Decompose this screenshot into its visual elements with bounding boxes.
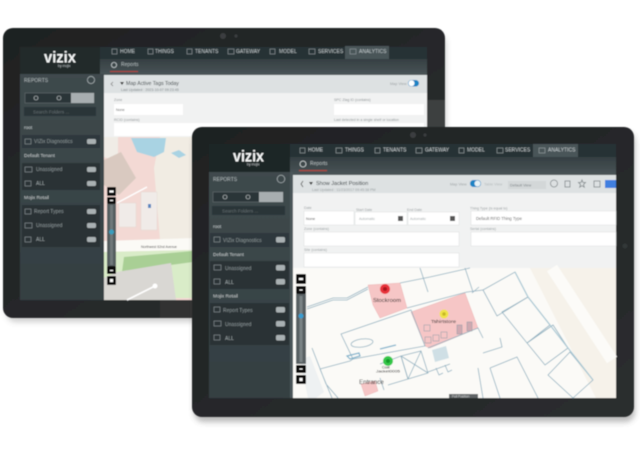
report form: None (116, 108, 125, 112)
report header (293, 175, 616, 193)
navigation bar: MODEL (467, 148, 485, 154)
sidebar: Search Folders ... (33, 110, 69, 114)
navigation bar: THINGS (155, 49, 175, 55)
logo: vizix (44, 50, 76, 67)
navigation bar: TENANTS (195, 49, 219, 55)
report header: Map Active Tags Today (126, 81, 179, 87)
report form: Start Date (356, 208, 372, 212)
navigation bar: THINGS (345, 148, 365, 154)
report form: Automatic (410, 217, 426, 221)
report header: Map View (390, 82, 407, 86)
tablet: back (3, 28, 446, 322)
sidebar: Unassigned (225, 266, 252, 272)
logo (20, 47, 100, 74)
tablet bezel (192, 127, 634, 417)
sidebar: Default Tenant (24, 153, 56, 159)
sidebar: REPORTS (24, 78, 49, 84)
sidebar: Unassigned (225, 322, 252, 328)
report form: Date (304, 206, 312, 210)
navigation bar: SERVICES (318, 49, 344, 55)
report form: RCID (contains) (114, 118, 140, 122)
sidebar: Report Types (223, 308, 253, 314)
sidebar: ALL (225, 336, 234, 342)
sidebar: Search Folders ... (222, 208, 258, 214)
map zoom controls (296, 274, 306, 384)
sidebar: VIZix Diagnostics (34, 139, 73, 145)
report form (104, 93, 427, 138)
navigation bar (20, 46, 427, 75)
marker: yellow item (431, 310, 457, 324)
logo: by mojix (247, 162, 260, 166)
navigation bar: Reports (121, 62, 139, 68)
report form (293, 193, 616, 268)
logo (209, 144, 290, 172)
pink rooms (361, 283, 478, 396)
report form: Default RFID Thing Type (476, 216, 523, 221)
sidebar: Default Tenant (213, 252, 245, 258)
marker: stockroom (373, 284, 401, 304)
sidebar: Report Types (34, 209, 64, 215)
entrance label: Entrance (359, 379, 384, 386)
report form: Zone (114, 98, 122, 102)
report form: Site (contains) (304, 248, 327, 252)
sidebar: Unassigned (36, 223, 63, 229)
street map: Northwest 62nd Avenue (141, 245, 177, 249)
side button (622, 244, 628, 248)
navigation bar: GATEWAY (425, 148, 450, 154)
report header: Last Updated : 2023-10-07 09:23:45 (121, 88, 179, 92)
report form: SPC Zlag ID (contains) (334, 98, 371, 102)
navigation bar: GATEWAY (236, 49, 261, 55)
camera (410, 132, 427, 138)
sidebar (20, 74, 104, 300)
lower bezel shade (160, 300, 193, 318)
report form: End Date (407, 208, 422, 212)
navigation bar: Reports (310, 161, 328, 167)
navigation bar: SERVICES (505, 148, 531, 154)
street map (104, 137, 194, 300)
report header: Show Jacket Position (316, 181, 368, 187)
navigation bar: HOME (120, 49, 136, 55)
report form: None (306, 217, 315, 221)
marker: yellow item: Tshirtstore (431, 319, 457, 324)
navigation bar: HOME (308, 148, 324, 154)
logo: by mojix (58, 64, 71, 68)
navigation bar: ANALYTICS (548, 148, 576, 154)
full position tooltip: Full Position (452, 394, 470, 398)
sidebar: VIZix Diagnostics (223, 238, 262, 244)
report header (104, 75, 427, 93)
marker: stockroom: Stockroom (373, 298, 401, 304)
report form: Zone (contains) (304, 227, 329, 231)
navigation bar: ANALYTICS (359, 49, 387, 55)
sidebar: Mojix Retail (213, 294, 238, 300)
sidebar: root (24, 125, 33, 131)
sidebar: ALL (36, 237, 45, 243)
sidebar: Unassigned (36, 167, 63, 173)
camera (220, 33, 238, 39)
sidebar: ALL (225, 280, 234, 286)
report form: Serial (contains) (470, 227, 496, 231)
marker: jacket: Jacket0005 (376, 370, 400, 374)
report form: Last detected in a single shelf or location (334, 118, 399, 122)
tablet bezel (3, 28, 445, 318)
logo: vizix (233, 148, 264, 166)
floor plan walls (307, 268, 593, 398)
report header: Map View (450, 182, 467, 186)
tablet: front (192, 127, 635, 422)
sidebar (209, 172, 293, 398)
sidebar: ALL (36, 181, 45, 187)
navigation bar: TENANTS (383, 148, 407, 154)
marker: jacket: Coat (382, 366, 390, 370)
report header: Default View (510, 184, 532, 188)
report form: Automatic (359, 217, 375, 221)
report header: Last Updated : 11/23/2017 09:45:38 PM (312, 188, 375, 192)
sidebar: Mojix Retail (24, 195, 49, 201)
navigation bar (209, 144, 616, 175)
sidebar: REPORTS (213, 177, 238, 183)
floor plan map (293, 268, 616, 398)
sidebar: root (213, 224, 222, 230)
navigation bar: MODEL (279, 49, 297, 55)
map zoom controls (107, 187, 116, 285)
report header: Table View (484, 182, 503, 186)
report form: Thing Type (is equal to) (470, 206, 508, 210)
marker: jacket (376, 356, 400, 374)
full position tooltip (449, 394, 478, 398)
